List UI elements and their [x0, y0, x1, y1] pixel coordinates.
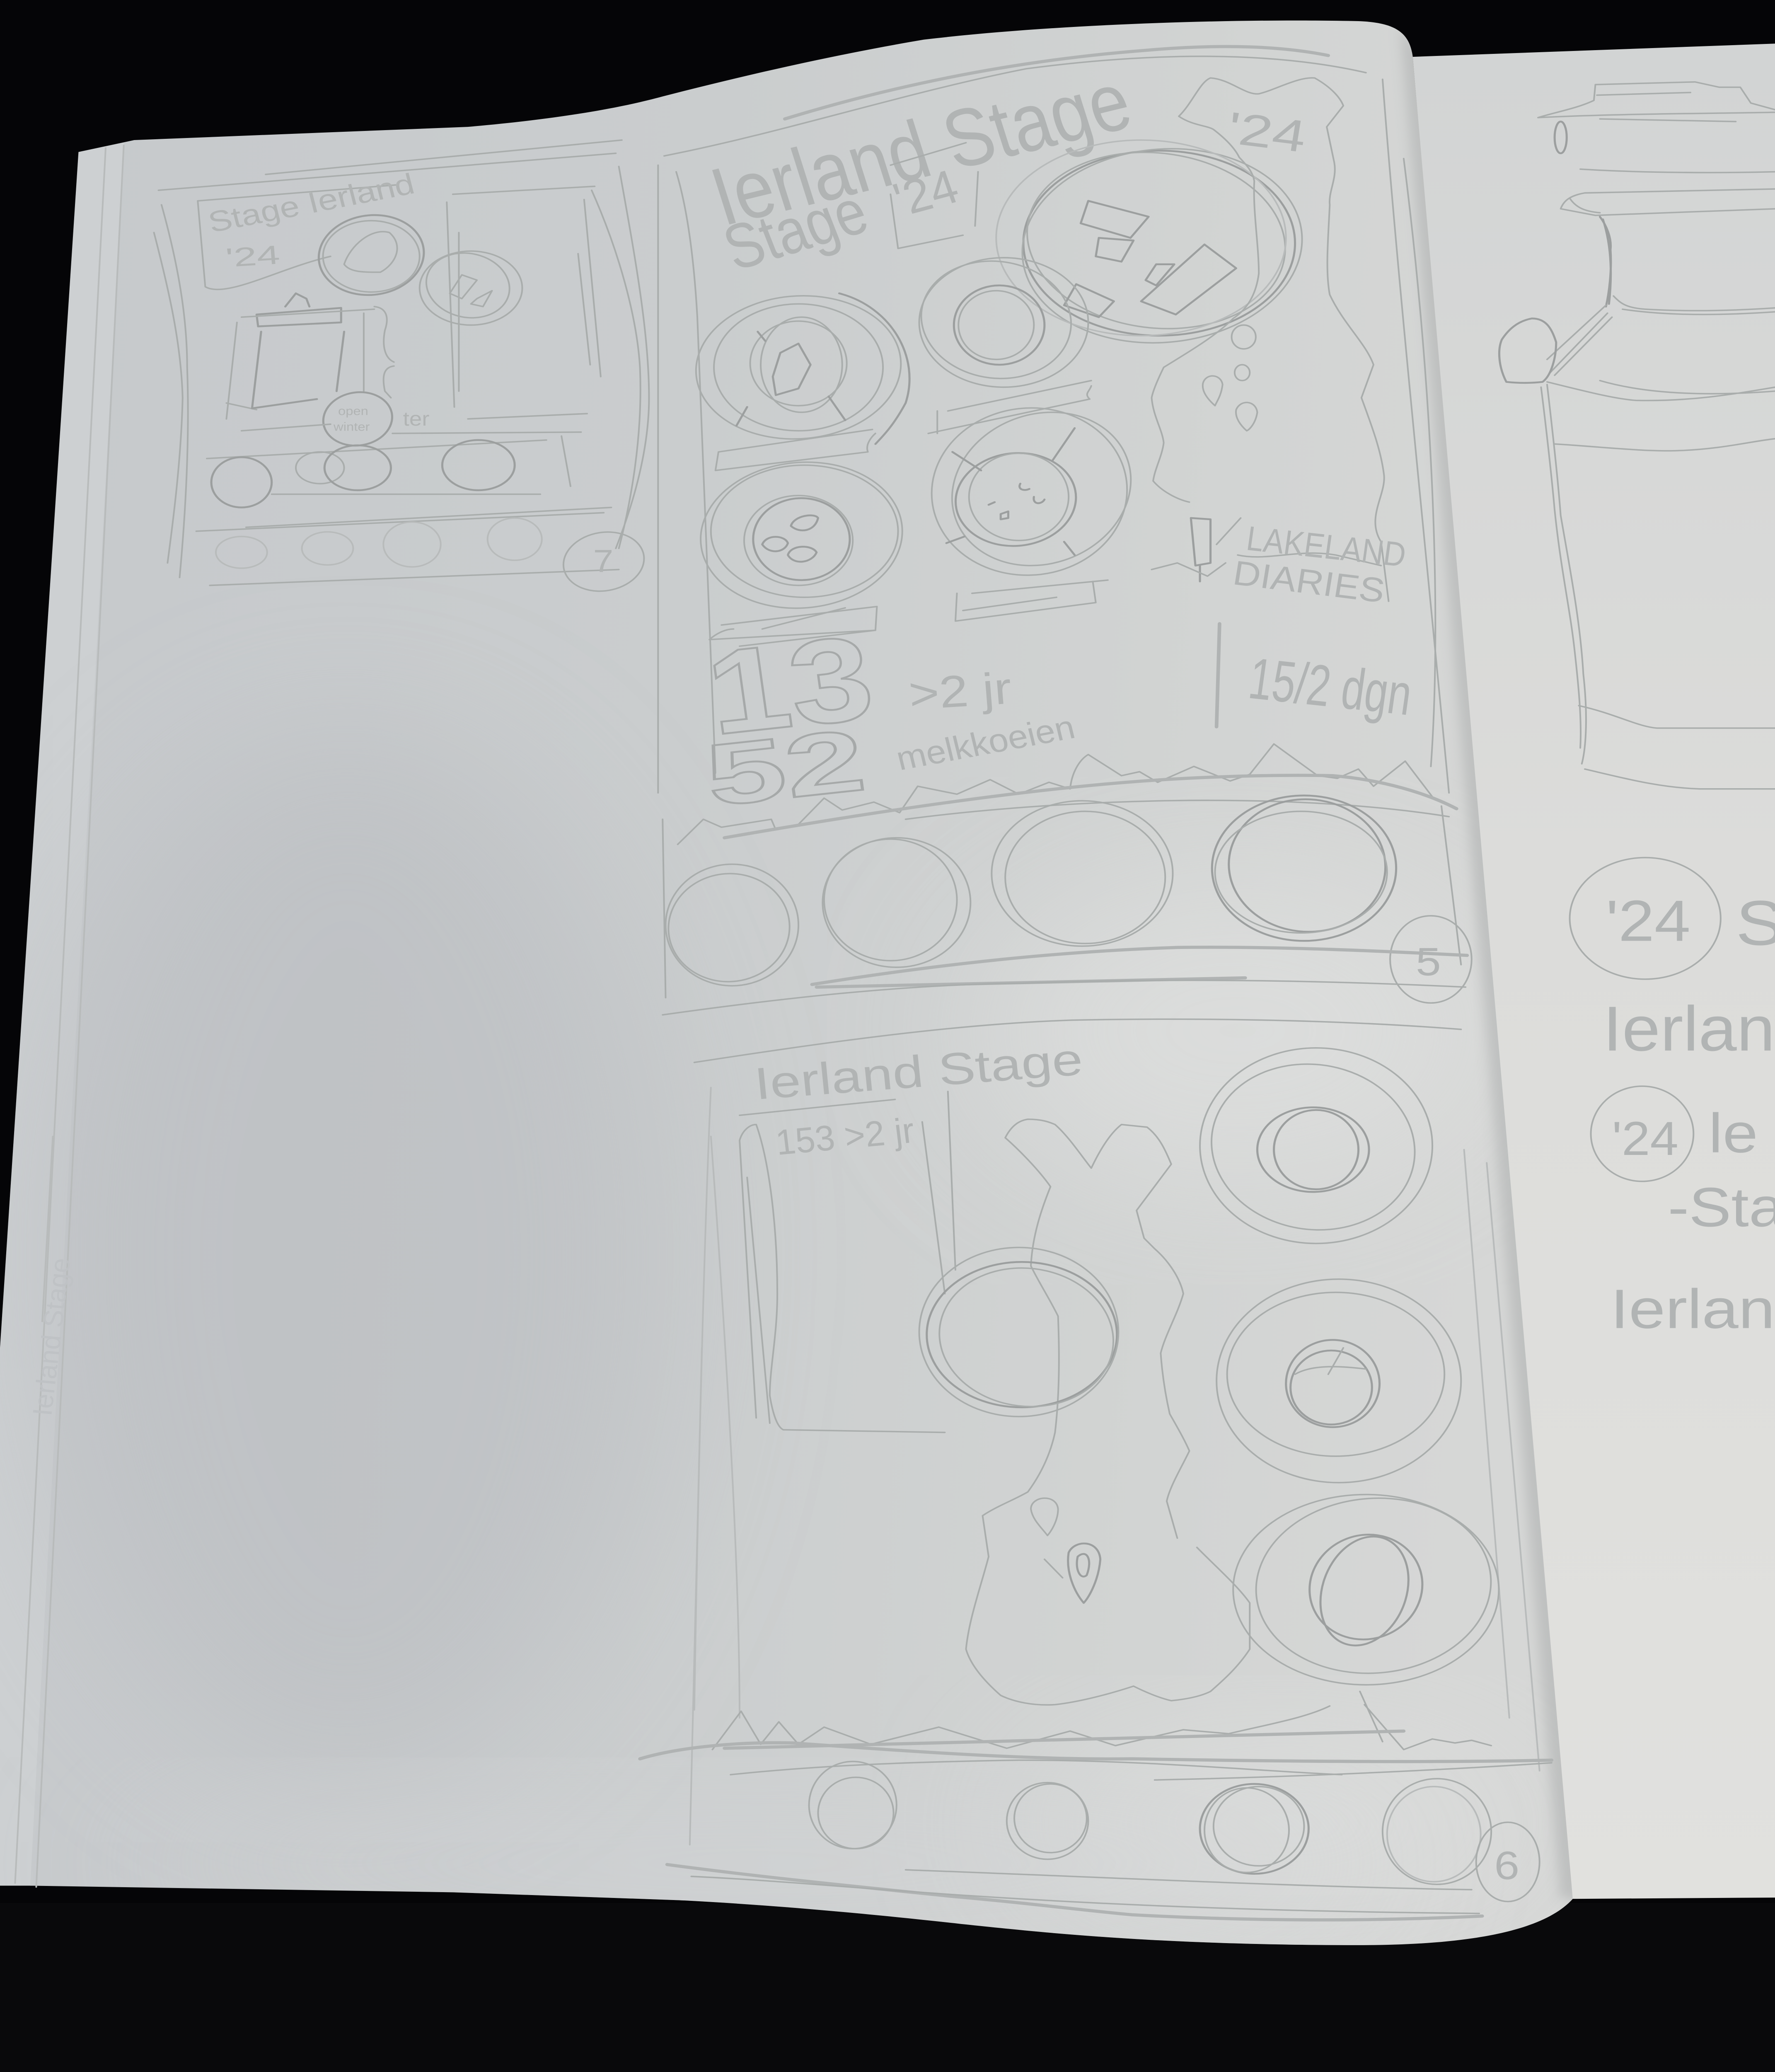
page number 5: 5 — [1416, 939, 1441, 984]
photo circle: bottle — [688, 287, 909, 448]
location pins — [1203, 325, 1257, 431]
landscape skyline divider — [678, 744, 1432, 845]
title line 2: Stage '24: '24 — [887, 160, 965, 227]
sketch: '24 bullet list — [1570, 858, 1775, 1340]
closing scribble lines — [667, 1864, 1482, 1920]
Ireland map with labels: '24 — [1224, 103, 1310, 162]
map circle — [919, 1247, 1131, 1423]
bullet 2: '24 — [1612, 1112, 1678, 1165]
circle 1 — [651, 859, 807, 997]
circle 2 — [822, 838, 970, 967]
right page — [1413, 44, 1775, 1899]
bottom circle 4 — [1383, 1779, 1491, 1884]
pointer ticks and face marks — [946, 428, 1075, 555]
stat: 52 melkkoeien: melkkoeien — [892, 709, 1079, 777]
Ireland map with labels — [1152, 78, 1388, 601]
lid mark — [1555, 121, 1567, 153]
landscape skyline divider — [712, 1705, 1491, 1750]
sketch: milk can — [1499, 82, 1775, 789]
panel: bottom strip of circles, page 5 — [651, 775, 1472, 1015]
collar — [1561, 189, 1775, 215]
page number 6: 6 — [1494, 1843, 1519, 1888]
neck base — [1613, 296, 1775, 315]
right circle 3 — [1233, 1485, 1504, 1742]
caption bar 1 — [928, 380, 1091, 433]
bottle — [737, 332, 845, 426]
stat: 15/2 dgn — [1216, 624, 1416, 727]
photo circle: food — [690, 451, 913, 620]
can shoulder — [1547, 305, 1612, 375]
stat: 13 > 2 jr: 13 — [699, 611, 881, 760]
stat: 13 > 2 jr: >2 jr — [907, 663, 1013, 719]
badge: open winter: open — [338, 404, 368, 418]
can lid — [1538, 82, 1775, 121]
three eggs — [762, 516, 818, 562]
logo: Lakeland Dairies — [1152, 518, 1408, 610]
building shapes — [1064, 201, 1236, 317]
line: Ierlan 2: Ierlan — [1611, 1278, 1775, 1340]
bullet 1: '24 — [1606, 888, 1690, 953]
page number 7: 7 — [593, 544, 613, 579]
heading: Ierland Stage: Ierland Stage — [752, 1034, 1085, 1109]
logo: Lakeland Dairies: LAKELAND — [1244, 519, 1408, 574]
photo circle: face — [903, 380, 1166, 601]
stat: 52 melkkoeien — [700, 709, 1079, 825]
stat: 13 > 2 jr — [699, 611, 1013, 760]
row of circles — [211, 440, 515, 507]
label: '24: '24 — [225, 240, 281, 273]
photo circle 2 — [416, 243, 522, 328]
bottom circle 2 — [1007, 1783, 1088, 1859]
badge: open winter: ter — [403, 408, 429, 430]
bottom circle 1 — [809, 1762, 897, 1849]
dark fabric below the book — [0, 1903, 1775, 2072]
photo circle: top — [906, 247, 1088, 393]
text block frame — [740, 1092, 955, 1433]
badge: open winter: winter — [333, 420, 370, 433]
caption bar 4 — [955, 580, 1108, 621]
can handle — [1499, 318, 1556, 383]
badge: open winter — [317, 385, 429, 452]
Ireland map outline — [966, 1119, 1250, 1705]
title: Stage Ierland: Stage Ierland — [205, 167, 418, 239]
large photo circle: buildings — [996, 133, 1316, 358]
stat: 15/2 dgn: 15/2 dgn — [1245, 646, 1416, 727]
bottom circle 3 — [1200, 1784, 1308, 1874]
clipboard — [226, 293, 394, 419]
can neck — [1600, 217, 1611, 307]
page stack edge — [0, 140, 134, 1886]
bullet 1 — [1570, 858, 1775, 979]
pin icons — [1031, 1498, 1100, 1603]
page number 5 — [1390, 916, 1472, 1003]
circle 3 — [991, 801, 1173, 946]
right circle 1 — [1185, 1039, 1441, 1255]
title: Ierland Stage: Ierland Stage — [700, 54, 1141, 243]
title line 2: Stage '24: Stage — [713, 175, 877, 284]
panel: lower page layout 6 — [640, 1019, 1552, 1920]
title box — [198, 185, 395, 290]
caption bar 3 — [709, 607, 877, 646]
title line 2: Stage '24 — [713, 143, 978, 284]
brace — [374, 307, 394, 398]
panel: main page layout 5 — [658, 46, 1449, 845]
panel: small thumbnail sketch, page 7 — [154, 140, 652, 599]
can body — [1541, 380, 1775, 789]
row of faint circles — [216, 518, 542, 568]
stat: 52 melkkoeien: 52 — [700, 711, 871, 825]
circle 4 — [1212, 784, 1403, 947]
stack edge lines — [15, 145, 124, 1887]
right circle 2 — [1216, 1279, 1461, 1483]
ghost text at the far left edge: Ierland Stage — [27, 1256, 76, 1417]
bullet 2: le — [1709, 1102, 1758, 1164]
logo: Lakeland Dairies: DIARIES — [1231, 553, 1388, 610]
lid band — [1580, 169, 1775, 172]
page number 7 — [556, 524, 652, 599]
text block frame: 153 >2 jr — [774, 1110, 917, 1163]
photo circle 1 — [310, 207, 433, 303]
page number 6 — [1476, 1822, 1540, 1902]
caption bar 2 — [716, 429, 875, 470]
bullet 2 — [1591, 1086, 1758, 1181]
